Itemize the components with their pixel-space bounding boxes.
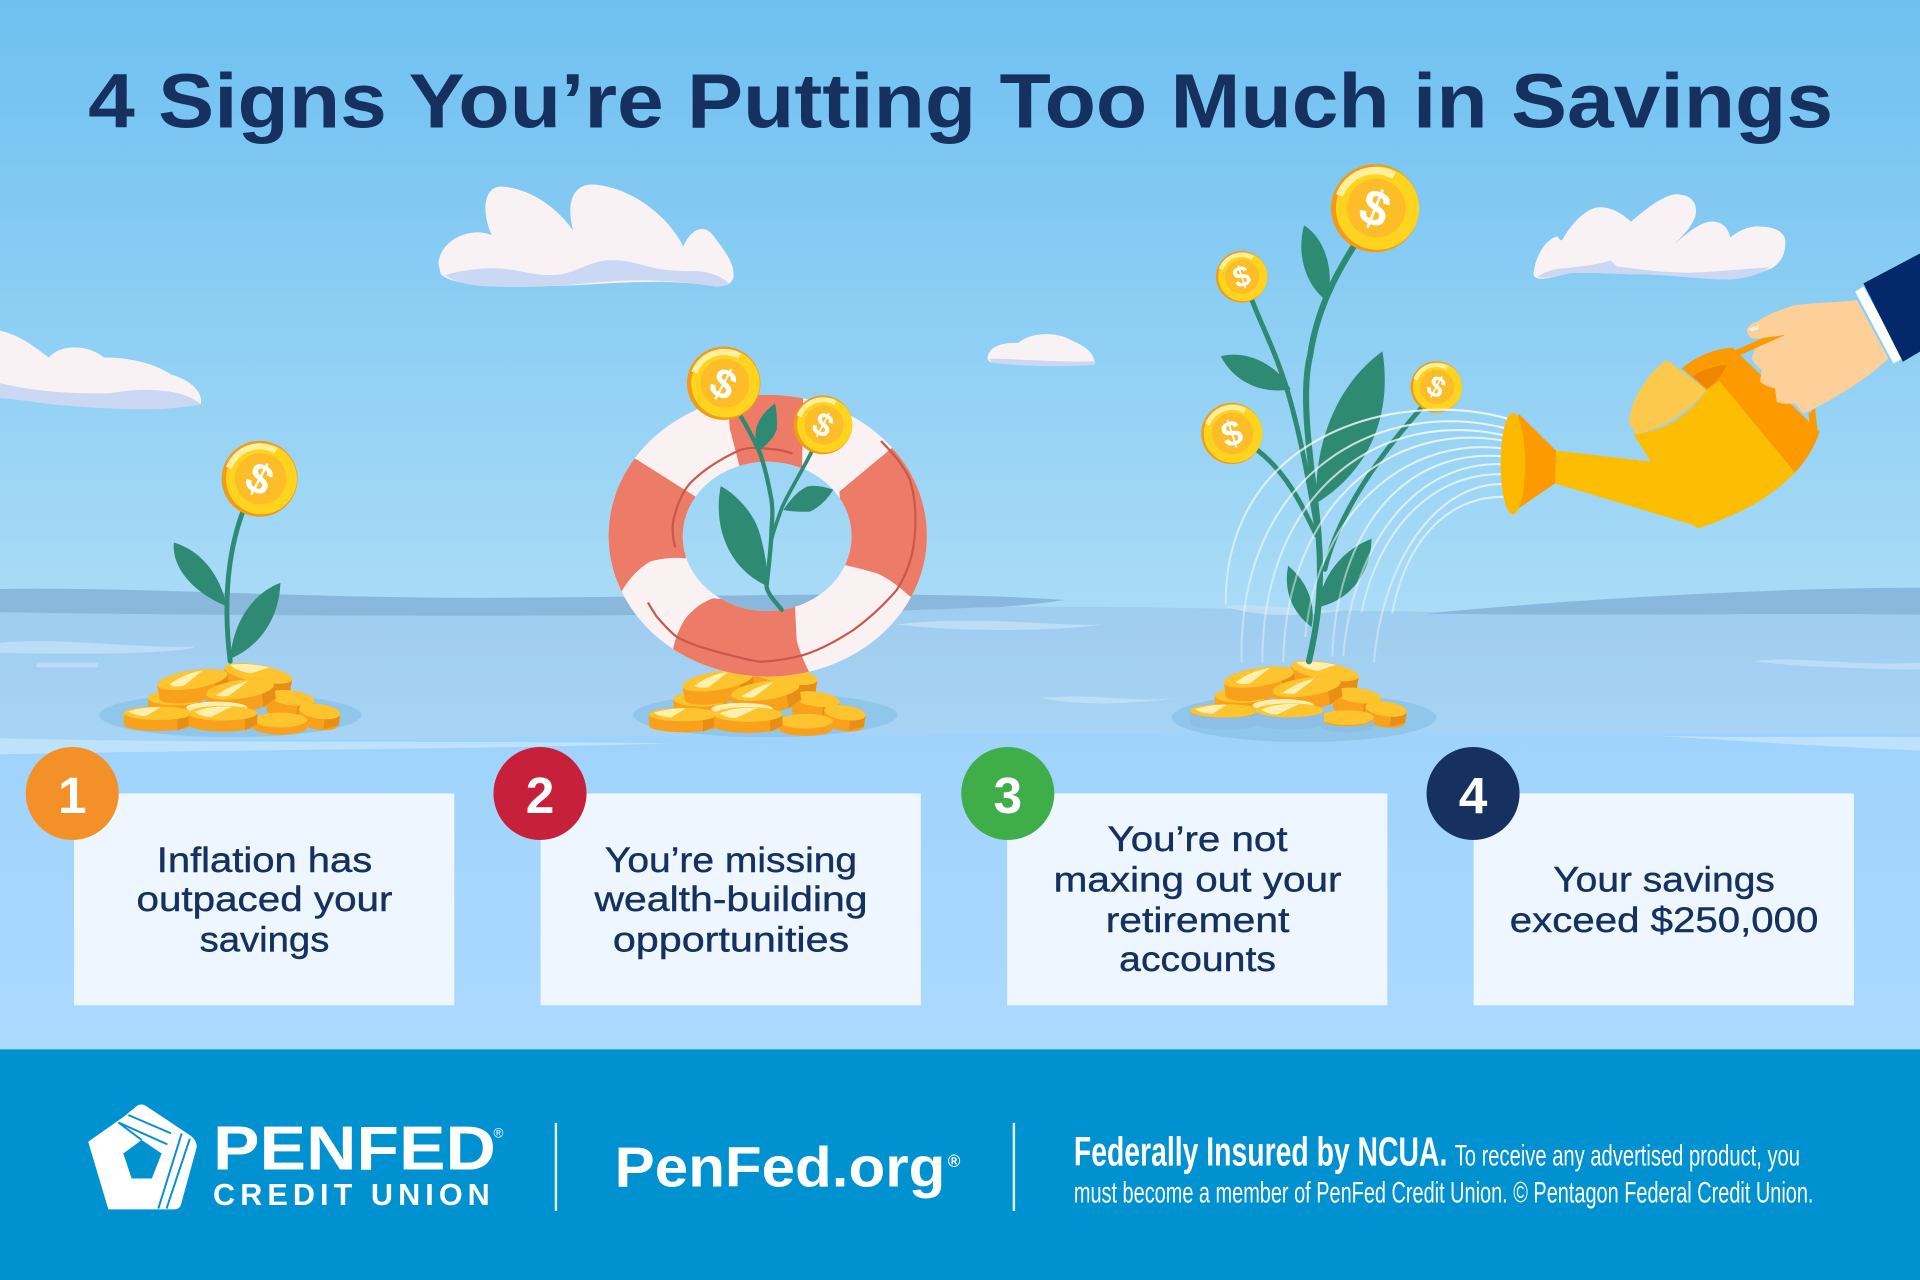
panel: sign 2 xyxy=(493,747,921,1005)
leaf pair 1 xyxy=(174,542,280,659)
number badge 2 xyxy=(493,747,587,840)
text: sign 3: You’re not xyxy=(1108,819,1288,859)
coin pile shadow 2 xyxy=(633,693,898,737)
text: sign 4 xyxy=(1510,859,1818,940)
number 4: 4 xyxy=(1459,766,1488,824)
hand with sleeve xyxy=(1735,253,1920,413)
water surface xyxy=(0,607,1920,747)
text: sign 1: outpaced your xyxy=(137,879,393,919)
plant stems xyxy=(740,415,812,610)
PenFed logo mark xyxy=(88,1104,197,1209)
number 2: 2 xyxy=(526,766,554,824)
cloud: left xyxy=(0,331,201,409)
cuff xyxy=(1855,287,1903,363)
credit union wordmark: CREDIT UNION xyxy=(213,1178,490,1212)
can side panel xyxy=(1719,348,1820,473)
cloud: top centre xyxy=(438,184,734,287)
life buoy ring xyxy=(608,394,927,677)
coin 2b: $ xyxy=(806,405,839,446)
distant land, left xyxy=(0,589,1065,617)
coin 3b xyxy=(1216,251,1267,302)
number 1: 1 xyxy=(58,766,87,824)
submerged coins xyxy=(1190,711,1374,732)
coin 3a: $ xyxy=(1352,177,1399,240)
number badge 1 xyxy=(26,747,119,840)
hand xyxy=(1747,300,1888,413)
coin 3d xyxy=(1201,403,1262,464)
coin 2a xyxy=(687,347,760,420)
panel: sign 4 xyxy=(1427,747,1854,1005)
website: PenFed.org xyxy=(615,1136,945,1199)
text: sign 2: wealth-building xyxy=(593,879,868,919)
water streams xyxy=(1226,410,1516,662)
illustration: sprout with one coin xyxy=(99,441,361,737)
registered mark: ® xyxy=(493,1126,503,1141)
coin 3c xyxy=(1411,361,1462,413)
nozzle cone xyxy=(1513,413,1556,512)
plant leaves xyxy=(1221,225,1385,627)
text: sign 2: You’re missing xyxy=(605,840,857,880)
number 3: 3 xyxy=(993,766,1022,824)
watering can xyxy=(1501,347,1820,528)
can flap xyxy=(1629,360,1707,434)
text: sign 3: retirement xyxy=(1106,900,1290,940)
text: sign 4: Your savings xyxy=(1553,859,1775,899)
thumb nail xyxy=(1749,324,1760,331)
coin 3a xyxy=(1331,164,1419,252)
panel: sign 1 xyxy=(26,747,454,1005)
lower light-blue band xyxy=(0,733,1920,1049)
plant stems xyxy=(1251,244,1422,661)
coin 2a: $ xyxy=(702,357,745,410)
number badge 4 xyxy=(1427,747,1520,840)
panel: sign 3 xyxy=(961,747,1387,1005)
legal bold text: Federally Insured by NCUA. xyxy=(1074,1129,1447,1175)
registered mark website: ® xyxy=(948,1151,961,1171)
illustration: money plant xyxy=(1172,164,1462,742)
title: 4 Signs You’re Putting Too Much in Savings xyxy=(88,58,1833,144)
text: sign 4: exceed $250,000 xyxy=(1510,900,1818,940)
coin pile 3 xyxy=(1190,657,1408,732)
text: sign 3: accounts xyxy=(1119,939,1276,979)
sleeve xyxy=(1863,253,1920,362)
front handle xyxy=(1735,335,1785,355)
text: sign 1 xyxy=(137,840,393,959)
coin 3b: $ xyxy=(1229,259,1255,295)
divider 1 xyxy=(555,1123,557,1211)
text: sign 3: maxing out your xyxy=(1054,859,1342,899)
PenFed wordmark: PENFED xyxy=(213,1113,496,1183)
cloud: small centre xyxy=(987,334,1095,366)
coin 1: $ xyxy=(237,453,281,506)
text: sign 3 xyxy=(1054,819,1342,979)
coin pile shadow 3 xyxy=(1172,693,1436,742)
coin pile 2 xyxy=(649,660,867,736)
coin 3c: $ xyxy=(1421,369,1451,406)
text: sign 2 xyxy=(593,840,868,959)
distant land, right xyxy=(1427,588,1920,615)
can opening xyxy=(1682,347,1734,390)
rear handle xyxy=(1808,408,1818,432)
number badge 3 xyxy=(961,747,1054,840)
coin 3d: $ xyxy=(1216,412,1248,456)
text: sign 1: Inflation has xyxy=(157,840,372,880)
cloud: top right xyxy=(1533,194,1785,280)
text: sign 1: savings xyxy=(200,919,329,959)
text: sign 2: opportunities xyxy=(613,919,849,959)
sky background xyxy=(0,0,1920,624)
can body and spout xyxy=(1555,381,1795,528)
can opening interior xyxy=(1693,365,1727,388)
footer band xyxy=(0,1049,1920,1280)
illustration: life buoy with plant xyxy=(608,346,927,737)
shoreline highlights xyxy=(0,736,1920,754)
divider 2 xyxy=(1013,1123,1015,1211)
coin 1 xyxy=(222,441,298,517)
coin 2b xyxy=(793,396,852,454)
coin pile 1 xyxy=(124,659,341,735)
nozzle face xyxy=(1501,413,1525,515)
water highlights xyxy=(0,605,1920,703)
coin pile shadow 1 xyxy=(99,693,361,737)
plant leaves xyxy=(719,403,833,587)
